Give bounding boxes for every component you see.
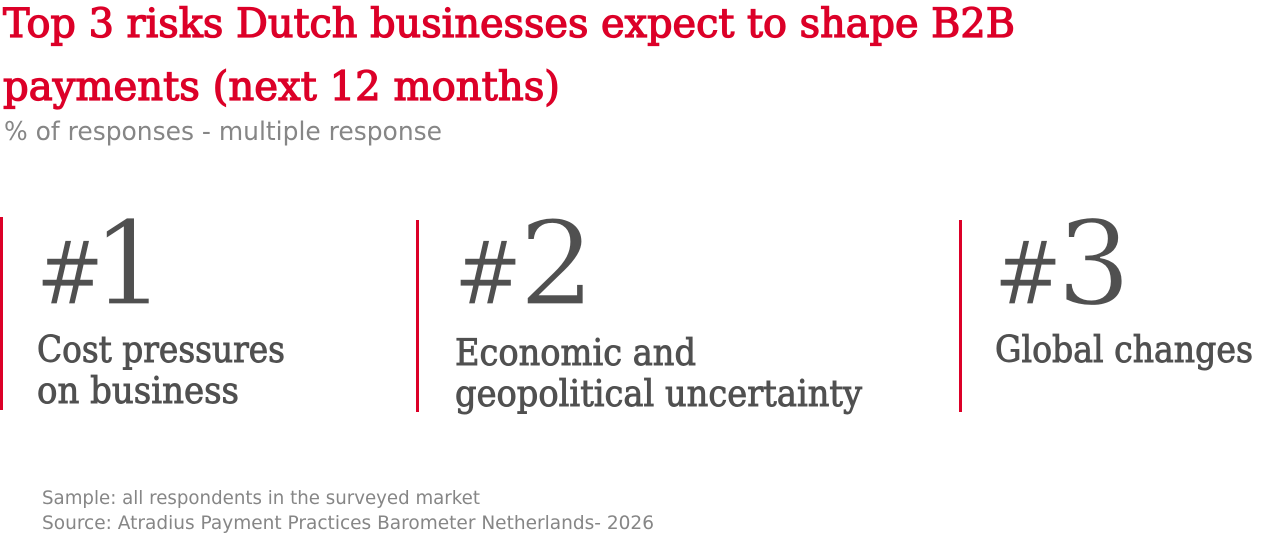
rank number 2 xyxy=(454,197,595,332)
rank number 3: # xyxy=(994,222,1062,325)
panel: risk 1 xyxy=(0,197,285,412)
title: Top 3 risks Dutch businesses expect to shape B2B xyxy=(3,1,1015,47)
rank number 1: # xyxy=(36,222,104,325)
label: economic uncertainty: Economic and xyxy=(455,333,696,374)
panel: risk 3 xyxy=(959,197,1253,412)
title xyxy=(3,1,1015,110)
rank number 2: # xyxy=(454,222,522,325)
footnote: sample and source xyxy=(42,487,654,534)
label: cost pressures: Cost pressures xyxy=(37,330,285,371)
title: payments (next 12 months) xyxy=(3,64,560,110)
footnote: sample and source: Sample: all respondents in the surveyed market xyxy=(42,487,480,509)
label: economic uncertainty: geopolitical uncertainty xyxy=(455,374,863,415)
rank number 3: 3 xyxy=(1057,197,1131,332)
rank number 3 xyxy=(994,197,1131,332)
rank number 1: 1 xyxy=(92,197,166,332)
panel: risk 2 xyxy=(416,197,863,415)
label: global changes: Global changes xyxy=(995,330,1253,371)
rank number 1 xyxy=(36,197,166,332)
subtitle: % of responses - multiple response xyxy=(4,117,442,147)
label: economic uncertainty xyxy=(455,333,863,415)
label: cost pressures: on business xyxy=(37,371,239,412)
footnote: sample and source: Source: Atradius Payment Practices Barometer Netherlands- 2026 xyxy=(42,512,654,534)
rank number 2: 2 xyxy=(519,197,595,332)
label: cost pressures xyxy=(37,330,285,412)
